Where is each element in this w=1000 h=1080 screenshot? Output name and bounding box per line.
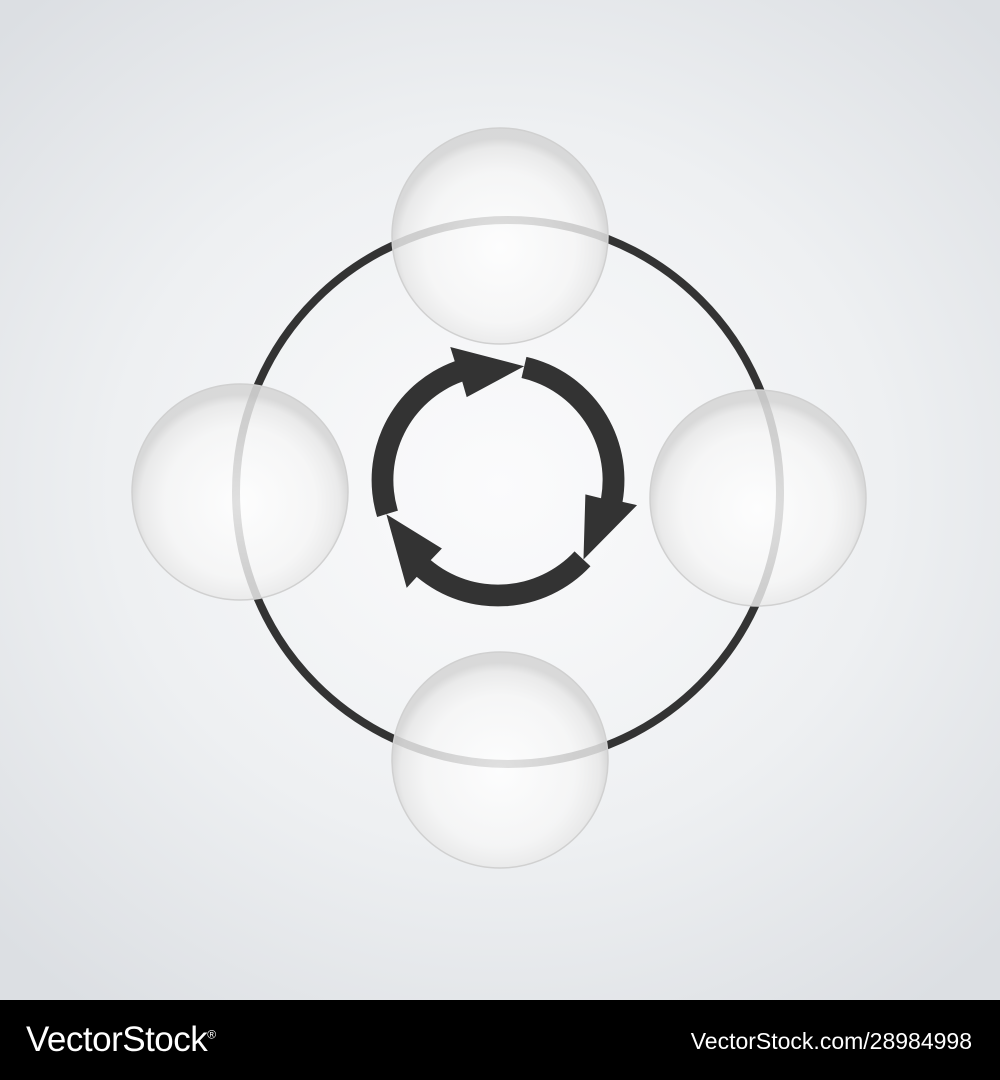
footer id: VectorStock.com/28984998 (691, 1028, 972, 1054)
icon: cycle arrows (370, 347, 676, 656)
bubble: right (650, 390, 866, 606)
bubble: left (132, 384, 348, 600)
bubble: top (392, 128, 608, 344)
bubble: bottom (392, 652, 608, 868)
footer brand: VectorStock® (26, 1020, 216, 1059)
footer (0, 1000, 1000, 1080)
outer ring (236, 220, 780, 764)
